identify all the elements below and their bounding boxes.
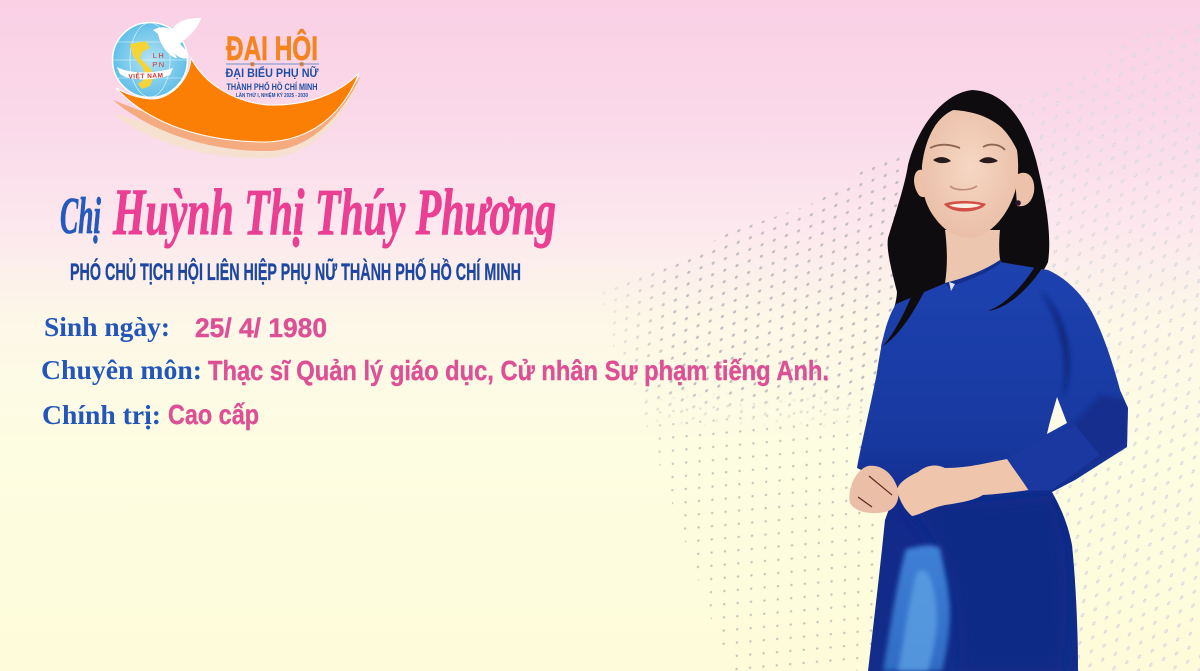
left hand: [849, 466, 898, 513]
logo globe: PN: [152, 60, 166, 69]
logo heading: LẦN THỨ I, NHIỆM KỲ 2025 - 2030: [236, 91, 308, 99]
left ear: [914, 170, 925, 197]
logo heading: ĐẠI BIỂU PHỤ NỮ: [226, 67, 319, 80]
logo swoosh: back layers: [113, 76, 361, 158]
right ear: [1015, 173, 1034, 206]
lips and smile: [944, 201, 986, 212]
necklace pendant: [949, 282, 955, 291]
person name heading: Huỳnh Thị Thúy Phương: [112, 176, 556, 249]
job title: PHÓ CHỦ TỊCH HỘI LIÊN HIỆP PHỤ NỮ THÀNH PHỐ HỒ CHÍ MINH: [70, 257, 521, 286]
face: [922, 110, 1018, 238]
political level row: Chính trị:: [42, 400, 161, 430]
birth date row: 25/ 4/ 1980: [195, 313, 327, 343]
logo heading: ĐẠI HỘI: [226, 29, 318, 68]
logo ribbon: [117, 67, 173, 79]
specialty row: [41, 355, 829, 386]
dress shading: [905, 290, 1128, 671]
birth date row: [44, 312, 327, 343]
icon: white dove: [153, 18, 201, 59]
logo LHPN letters: LH: [153, 51, 165, 60]
icon: map of Vietnam: [130, 41, 154, 89]
earring: [1015, 200, 1021, 206]
right hand and forearm: [897, 459, 1029, 516]
logo heading: [226, 29, 319, 99]
dress light panel: [883, 545, 950, 671]
eyes: [933, 157, 998, 163]
front hair strands: [917, 105, 1026, 172]
sleeve cuff: [1007, 425, 1100, 491]
logo globe: [112, 22, 188, 98]
halftone dot pattern: [590, 0, 1200, 671]
logo heading: THÀNH PHỐ HỒ CHÍ MINH: [226, 81, 318, 92]
person name heading: [60, 176, 556, 249]
specialty row: Chuyên môn:: [41, 355, 202, 385]
birth date row: Sinh ngày:: [44, 312, 170, 342]
neck: [945, 230, 1002, 283]
nose: [950, 186, 977, 190]
hair back: [881, 90, 1049, 347]
person name heading: Chị: [60, 188, 101, 245]
eyebrows: [930, 145, 1005, 150]
gap between arm and body: [1047, 397, 1067, 434]
portrait of woman in blue ao dai: [849, 90, 1128, 671]
dress body and arms: [857, 262, 1128, 671]
political level row: Cao cấp: [168, 399, 259, 430]
logo globe: VIỆT NAM: [128, 70, 164, 81]
political level row: [42, 399, 259, 430]
fingernail marks: [858, 476, 892, 507]
logo swoosh: orange crescent: [116, 58, 359, 142]
specialty row: Thạc sĩ Quản lý giáo dục, Cử nhân Sư phạm tiếng Anh.: [208, 355, 829, 386]
logo: Đại hội đại biểu phụ nữ: [112, 18, 361, 158]
